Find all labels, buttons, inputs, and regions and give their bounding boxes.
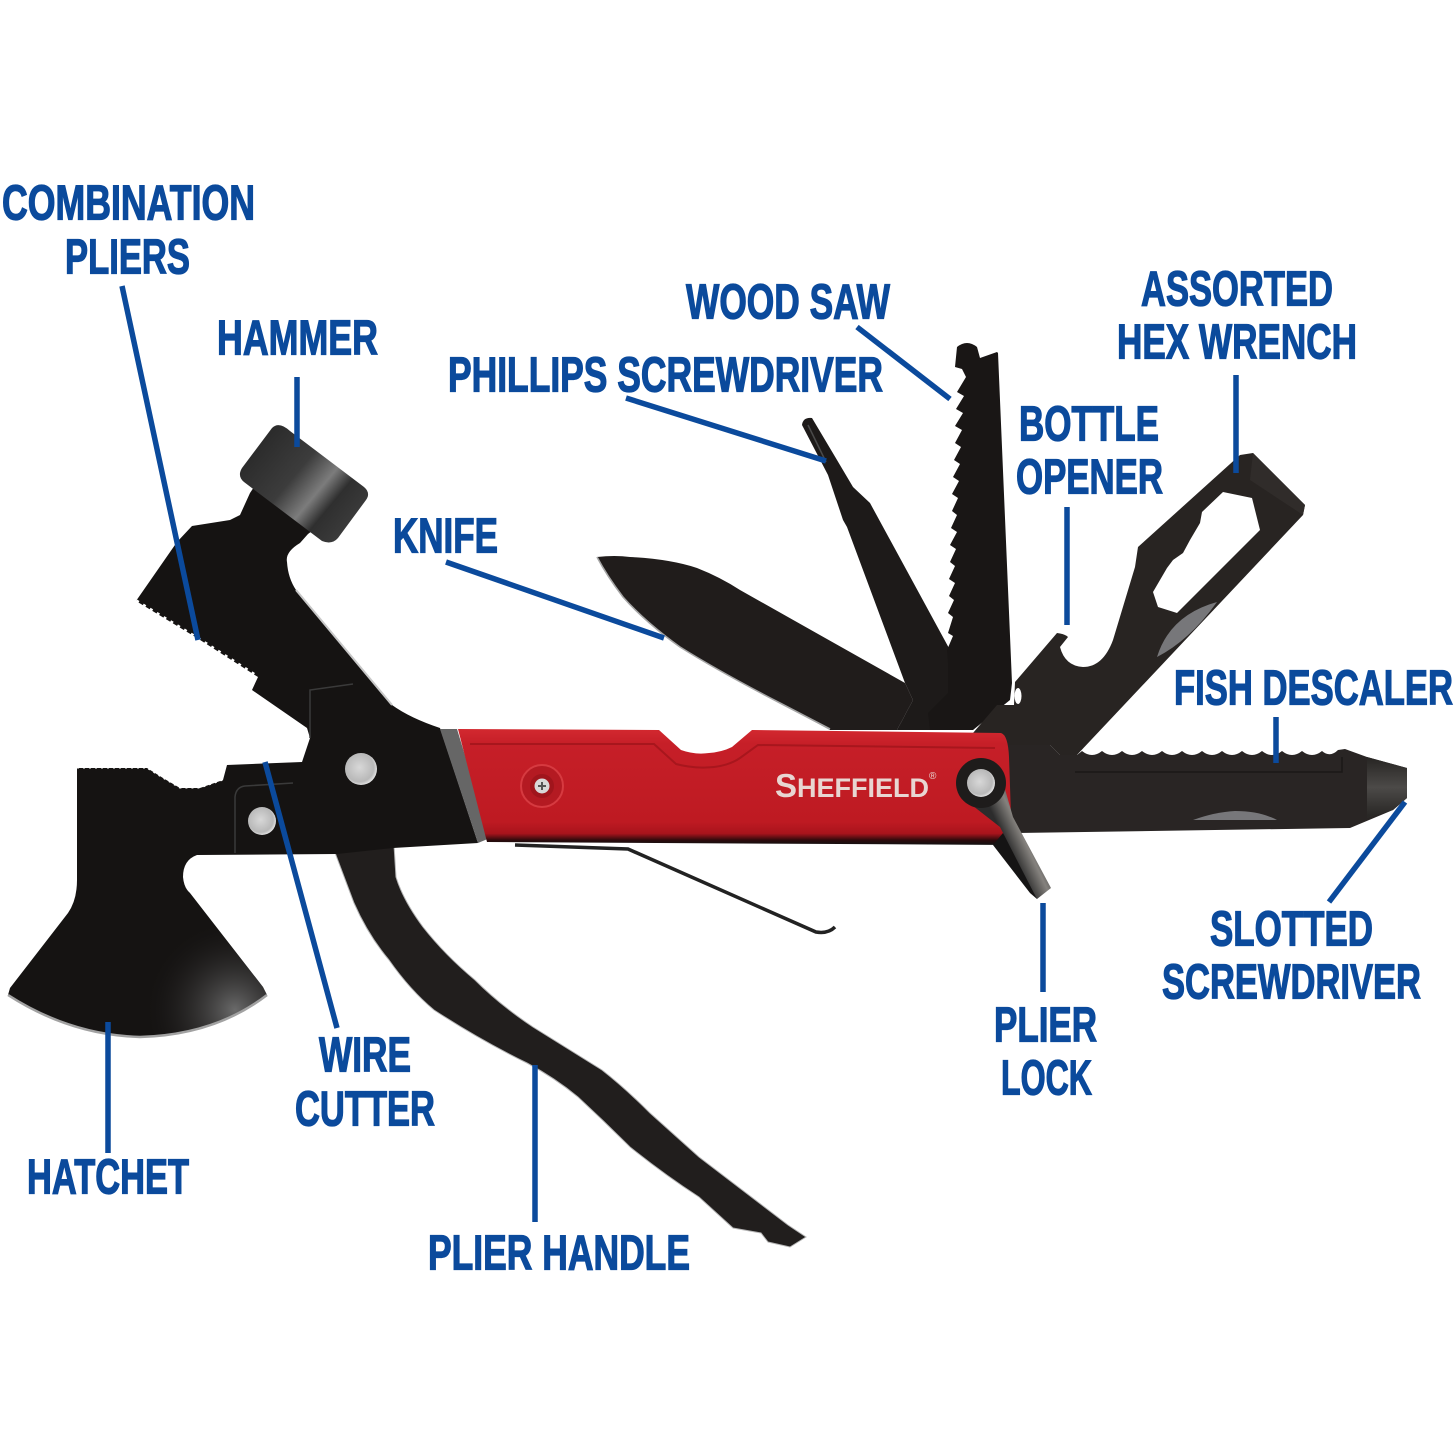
screw <box>521 765 563 807</box>
label: assorted hex wrench: HEX WRENCH <box>1117 316 1357 370</box>
label: wood saw: WOOD SAW <box>686 276 891 330</box>
label: wire cutter: WIRE <box>319 1028 411 1082</box>
label: bottle opener <box>1016 398 1163 504</box>
label: hatchet: HATCHET <box>27 1150 189 1204</box>
label: plier lock <box>994 998 1097 1106</box>
leader: wood saw <box>857 327 950 399</box>
multi-tool illustration <box>8 343 1407 1247</box>
tool: hammer head <box>240 425 368 542</box>
leader: phillips screwdriver <box>626 398 826 461</box>
label: bottle opener: OPENER <box>1016 450 1163 504</box>
label: combination pliers <box>2 176 255 284</box>
leader: knife <box>446 562 664 638</box>
red aluminium handle <box>458 729 1012 845</box>
tool: plier handle <box>334 845 806 1247</box>
grey bevel <box>440 729 490 843</box>
leader: fish descaler <box>1273 717 1279 763</box>
label: wire cutter: CUTTER <box>295 1082 435 1136</box>
plier lock lever <box>956 758 1051 899</box>
leader: assorted hex wrench <box>1233 375 1239 473</box>
leader: bottle opener <box>1064 507 1070 625</box>
leader: hammer <box>294 377 300 447</box>
label: hammer: HAMMER <box>217 312 378 366</box>
tool: hex wrench and bottle opener <box>973 453 1305 757</box>
brand logo: ® <box>929 771 937 782</box>
label: assorted hex wrench: ASSORTED <box>1141 262 1333 316</box>
label: plier lock: PLIER <box>994 998 1097 1052</box>
leader: wire cutter <box>265 762 337 1028</box>
label: combination pliers: PLIERS <box>65 230 190 284</box>
tool: wood saw <box>928 343 1012 730</box>
tool: fish descaler and slotted screwdriver <box>998 745 1407 833</box>
label: phillips screwdriver: PHILLIPS SCREWDRIVER <box>448 348 883 402</box>
bolt <box>967 769 995 797</box>
leader: plier lock <box>1040 903 1046 992</box>
label: slotted screwdriver <box>1162 902 1421 1010</box>
label: bottle opener: BOTTLE <box>1019 398 1159 452</box>
label: combination pliers: COMBINATION <box>2 176 255 230</box>
label: knife: KNIFE <box>393 510 498 564</box>
brand logo: SHEFFIELD <box>775 767 929 804</box>
label: plier handle: PLIER HANDLE <box>428 1226 690 1280</box>
label: slotted screwdriver: SLOTTED <box>1210 902 1373 956</box>
label: wire cutter <box>295 1028 435 1136</box>
leader: plier handle <box>532 1065 538 1222</box>
leader: combination pliers <box>122 286 198 640</box>
leader: hatchet <box>105 1022 111 1153</box>
tool: knife blade <box>597 556 913 730</box>
tool: phillips screwdriver <box>802 418 958 730</box>
rivets <box>248 753 377 835</box>
leader: slotted screwdriver <box>1329 802 1405 902</box>
label: plier lock: LOCK <box>1001 1052 1092 1106</box>
tool: hatchet, hammer jaw and plier head body <box>8 475 478 1037</box>
label: assorted hex wrench <box>1117 262 1357 370</box>
tool: belt clip <box>515 845 835 932</box>
